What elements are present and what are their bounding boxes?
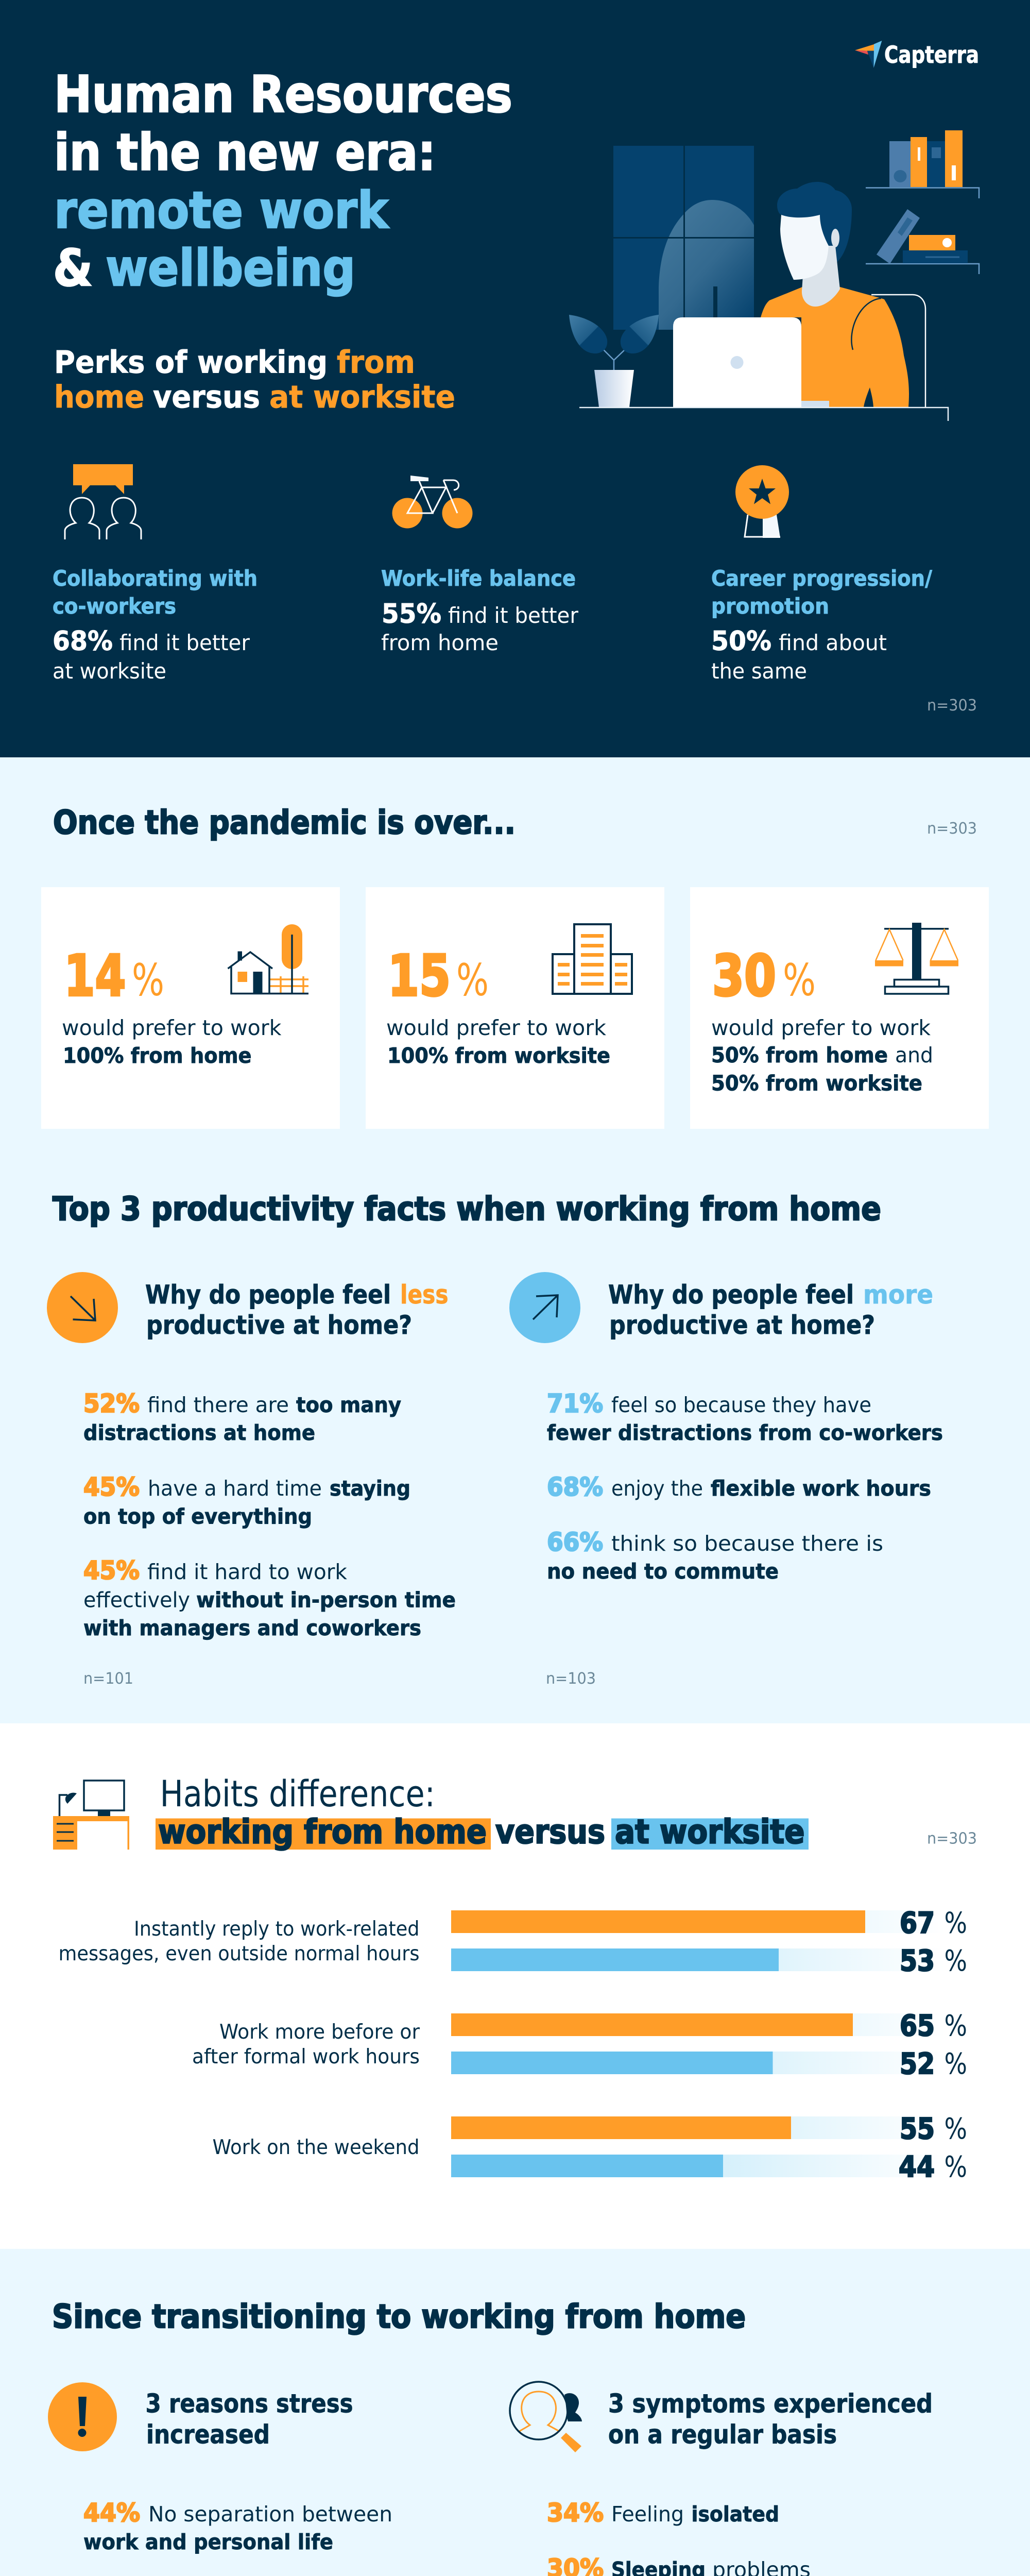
heading: habits difference: at worksite xyxy=(615,1814,804,1852)
icon: house and tree xyxy=(228,924,308,993)
card: 14% home: would prefer to work xyxy=(62,1015,282,1040)
subtitle: home xyxy=(54,379,144,415)
row: instantly reply xyxy=(59,1906,967,1978)
desk xyxy=(579,408,948,421)
panel: header xyxy=(0,0,1030,757)
subheading: increased xyxy=(146,2419,270,2449)
row: weekend: 55 xyxy=(900,2112,935,2146)
heading: habits difference: Habits difference: xyxy=(160,1773,435,1815)
card: 15% worksite: would prefer to work xyxy=(386,1015,606,1040)
heading: once the pandemic is over: Once the pandemic is over... xyxy=(53,804,516,841)
perk: work-life balance xyxy=(381,476,579,655)
logo: Capterra: Capterra xyxy=(884,41,979,69)
text: the same xyxy=(711,658,807,684)
icon: magnifier over person xyxy=(510,2382,582,2452)
subheading: more xyxy=(863,1280,933,1310)
icon: medal xyxy=(735,465,789,538)
text xyxy=(53,566,258,684)
card: 30% hybrid: 30 xyxy=(712,943,776,1009)
text xyxy=(381,566,579,655)
fact list: 71% xyxy=(547,1389,603,1418)
text: Career progression/ xyxy=(711,566,933,591)
icon: two people talking xyxy=(65,464,141,539)
text: find about xyxy=(779,630,887,655)
symptoms list: isolated xyxy=(691,2502,779,2527)
column: more productive xyxy=(509,1272,943,1688)
fact list: with managers and coworkers xyxy=(83,1616,421,1640)
card: 15% worksite: 15 xyxy=(388,943,451,1009)
row: work more: % xyxy=(945,2047,967,2081)
icon: balance scales xyxy=(875,923,958,994)
fact list: enjoy the xyxy=(611,1476,703,1501)
sample size: n=101 xyxy=(83,1670,133,1688)
card: 30% hybrid: % xyxy=(783,955,816,1006)
subheading xyxy=(145,2388,353,2449)
fact list: think so because there is xyxy=(611,1531,883,1556)
card: 15% worksite: % xyxy=(456,955,489,1006)
row: work more: % xyxy=(945,2009,967,2043)
text: 55% xyxy=(382,599,441,630)
fact list: without in-person time xyxy=(196,1588,456,1613)
fact list: too many xyxy=(296,1393,401,1417)
icon: arrow down xyxy=(47,1272,118,1343)
card: 30% hybrid: 50% from home xyxy=(711,1043,888,1067)
window xyxy=(613,146,754,330)
row: instantly reply: messages, even outside normal hours xyxy=(59,1942,419,1965)
row: weekend: Work on the weekend xyxy=(212,2136,419,2159)
bar chart: habits xyxy=(59,1906,967,2184)
subheading: productive at home? xyxy=(609,1310,875,1340)
heading: habits difference: working from home xyxy=(158,1814,487,1852)
subtitle xyxy=(54,344,455,415)
text: at worksite xyxy=(53,658,166,684)
text: find it better xyxy=(119,630,250,655)
card: 14% home xyxy=(41,887,340,1129)
symptoms list xyxy=(547,2498,866,2576)
row: work more xyxy=(192,2009,967,2081)
person xyxy=(761,182,909,407)
row: weekend xyxy=(212,2112,967,2184)
reasons list: work and personal life xyxy=(83,2530,333,2554)
title: wellbeing xyxy=(106,239,355,298)
text: 68% xyxy=(53,626,113,657)
fact list: 68% xyxy=(547,1472,603,1502)
fact list: distractions at home xyxy=(83,1420,315,1445)
text: Work-life balance xyxy=(381,566,576,591)
subheading: Why do people feel xyxy=(145,1280,391,1310)
fact list: on top of everything xyxy=(83,1504,312,1529)
column: stress reasons xyxy=(48,2382,407,2576)
sample size: n=103 xyxy=(546,1670,596,1688)
card: 30% hybrid: 50% from worksite xyxy=(711,1071,922,1095)
fact list: effectively xyxy=(83,1588,190,1613)
illustration: person working at a laptop xyxy=(569,130,979,421)
reasons list: No separation between xyxy=(148,2502,392,2527)
icon: desk with monitor and lamp xyxy=(53,1781,129,1850)
title: in the new era: xyxy=(54,124,436,182)
subheading: productive at home? xyxy=(146,1310,412,1340)
bookshelves xyxy=(866,130,979,274)
subheading: Why do people feel xyxy=(608,1280,854,1310)
fact list: find it hard to work xyxy=(147,1560,347,1584)
row: work more: 65 xyxy=(900,2009,935,2043)
perk: collaborating with co-workers xyxy=(53,464,258,684)
plant xyxy=(569,315,659,407)
heading: habits difference: versus xyxy=(495,1814,605,1852)
heading: Since transitioning to working from home xyxy=(52,2298,746,2335)
subheading: less xyxy=(400,1280,448,1310)
card: 30% hybrid: and xyxy=(895,1043,933,1067)
symptoms list: Feeling xyxy=(611,2502,684,2527)
title xyxy=(53,65,512,298)
text: co-workers xyxy=(53,594,176,619)
fact list: 45% xyxy=(83,1472,140,1502)
card: 15% worksite: 100% from worksite xyxy=(387,1043,610,1068)
fact list: 66% xyxy=(547,1528,603,1557)
fact list xyxy=(83,1389,456,1640)
symptoms list: 34% xyxy=(547,2498,604,2528)
card: 15% worksite xyxy=(366,887,664,1129)
column: symptoms xyxy=(510,2382,933,2576)
fact list: no need to commute xyxy=(547,1559,779,1584)
subtitle: from xyxy=(337,344,415,380)
text: from home xyxy=(381,630,499,655)
text: Collaborating with xyxy=(53,566,258,591)
text xyxy=(711,566,933,684)
row: work more: after formal work hours xyxy=(192,2045,420,2069)
text: promotion xyxy=(711,594,829,619)
subheading: 3 symptoms experienced xyxy=(608,2388,933,2418)
card: 30% hybrid xyxy=(690,887,989,1129)
title: Human Resources xyxy=(54,65,512,124)
logo: Capterra xyxy=(855,41,979,69)
subtitle: Perks of working xyxy=(54,344,328,380)
icon: office buildings xyxy=(553,924,632,994)
heading: habits difference xyxy=(156,1773,809,1852)
subheading xyxy=(608,2388,933,2449)
row: instantly reply: % xyxy=(945,1906,967,1940)
fact list: fewer distractions from co-workers xyxy=(547,1420,943,1445)
row: weekend: % xyxy=(945,2150,967,2184)
fact list: feel so because they have xyxy=(611,1393,871,1417)
card: 30% hybrid: would prefer to work xyxy=(711,1015,931,1040)
subheading xyxy=(145,1280,448,1340)
sample size: n=303 xyxy=(927,1830,977,1848)
column: less productive xyxy=(47,1272,456,1688)
icon: arrow up xyxy=(509,1272,580,1343)
fact list: 45% xyxy=(83,1556,140,1585)
row: instantly reply: Instantly reply to work-related xyxy=(134,1918,419,1941)
card: 14% home: % xyxy=(132,955,164,1006)
panel: since transitioning to working from home xyxy=(0,2249,1030,2576)
panel: habits difference xyxy=(0,1723,1030,2249)
fact list: find there are xyxy=(147,1393,289,1417)
fact list: flexible work hours xyxy=(711,1476,931,1501)
row: work more: Work more before or xyxy=(219,2021,420,2044)
icon: bicycle xyxy=(392,476,473,529)
row: weekend: 44 xyxy=(899,2150,935,2184)
title: & xyxy=(53,239,93,298)
card: 14% home: 14 xyxy=(64,943,126,1009)
chair xyxy=(871,295,925,408)
perk: career progression xyxy=(711,465,933,684)
heading: top 3 productivity facts: Top 3 productivity facts when working from home xyxy=(53,1190,881,1228)
row: instantly reply: 53 xyxy=(900,1944,935,1978)
reasons list: 44% xyxy=(83,2498,140,2528)
fact list: have a hard time xyxy=(148,1476,322,1501)
reasons list xyxy=(83,2498,407,2576)
fact list xyxy=(547,1389,943,1584)
subheading: on a regular basis xyxy=(608,2419,837,2449)
icon: exclamation mark xyxy=(48,2382,117,2451)
row: weekend: % xyxy=(945,2112,967,2146)
text: 50% xyxy=(711,626,771,657)
subtitle: versus xyxy=(153,379,260,415)
panel: once the pandemic is over and productivity xyxy=(0,757,1030,1723)
title: remote work xyxy=(54,181,390,240)
subheading xyxy=(608,1280,933,1340)
row: work more: 52 xyxy=(900,2047,935,2081)
row: instantly reply: % xyxy=(945,1944,967,1978)
sample size: n=303 xyxy=(927,697,977,715)
subtitle: at worksite xyxy=(269,379,455,415)
row: instantly reply: 67 xyxy=(900,1906,935,1940)
text: find it better xyxy=(448,603,579,628)
sample size: n=303 xyxy=(927,820,977,838)
subheading: 3 reasons stress xyxy=(145,2388,353,2418)
card: 14% home: 100% from home xyxy=(63,1043,251,1068)
laptop xyxy=(673,317,829,408)
fact list: 52% xyxy=(83,1389,140,1418)
fact list: staying xyxy=(330,1476,410,1501)
